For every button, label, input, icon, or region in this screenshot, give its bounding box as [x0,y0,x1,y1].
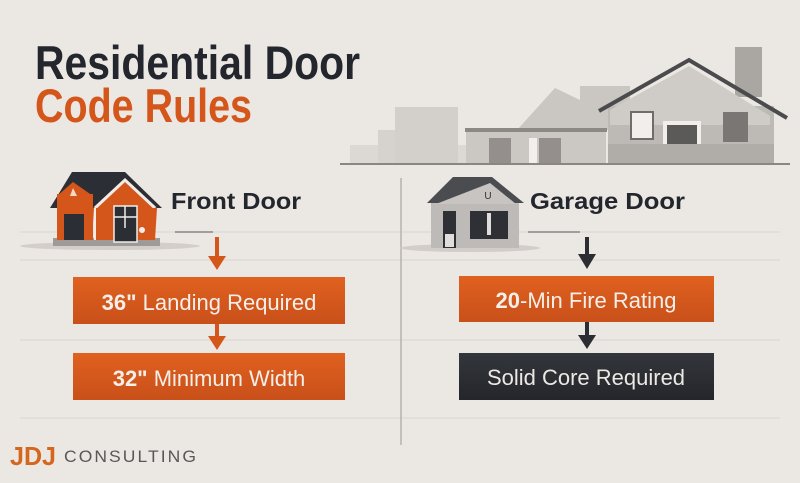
icon: front door house [20,172,200,250]
heading: Front Door: Front Door [171,188,301,214]
arrow: fire rating to solid core [578,322,596,349]
box: 36 landing: 36" Landing Required [102,290,316,315]
logo: JDJ Consulting: CONSULTING [64,447,198,466]
box: solid core required: Solid Core Required [487,365,685,390]
title: Residential Door [35,36,360,89]
box: 36 landing [73,277,345,324]
logo: JDJ Consulting [10,441,198,471]
arrow: garage to fire rating [578,237,596,269]
box: 32 minimum width [73,353,345,400]
box: solid core required [459,353,714,400]
heading: Garage Door: Garage Door [530,188,685,214]
title [35,36,360,132]
box: 20-min fire rating [459,276,714,322]
icon: garage house [400,177,540,252]
icon: garage house: U [484,191,492,202]
background house illustration [340,47,790,164]
box: 20-min fire rating: 20-Min Fire Rating [496,288,676,313]
box: 32 minimum width: 32" Minimum Width [113,366,305,391]
title: Code Rules [35,79,252,132]
arrow: front to landing [208,237,226,270]
arrow: landing to width [208,324,226,350]
logo: JDJ Consulting: JDJ [10,441,56,471]
